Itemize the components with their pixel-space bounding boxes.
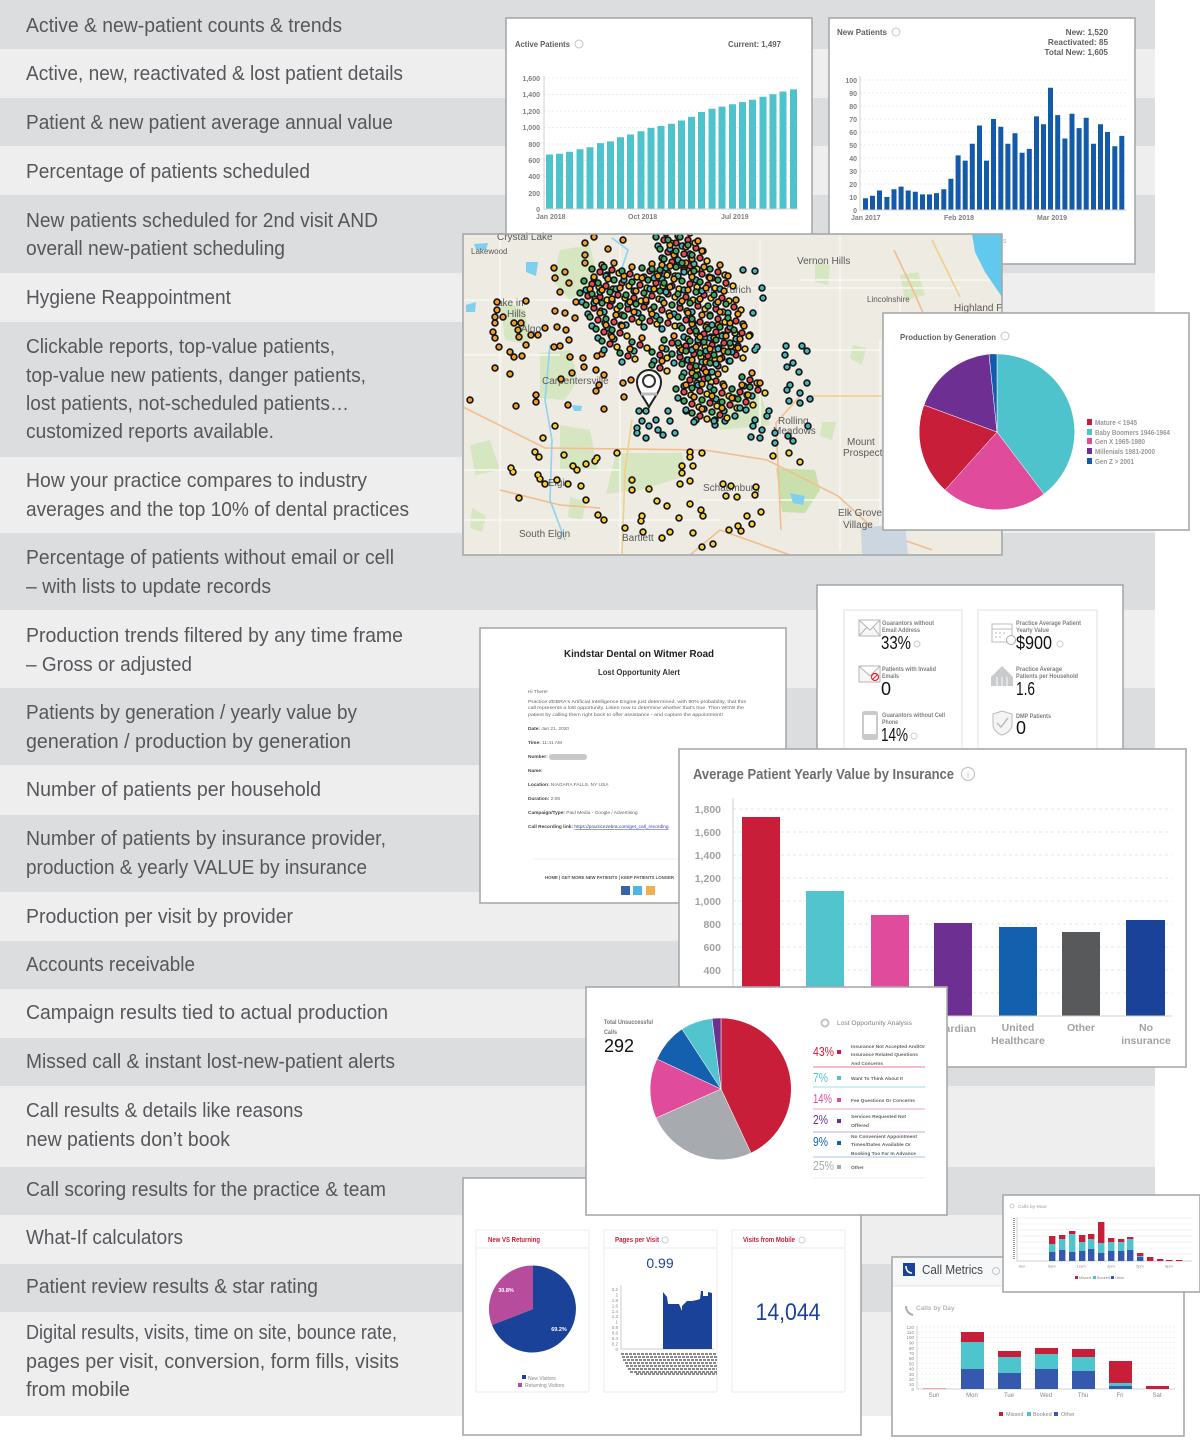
row: calculators xyxy=(0,1215,1155,1264)
stat: DMP patients: 0 xyxy=(1016,718,1026,738)
bar chart: insurance: 800 xyxy=(703,919,721,931)
panel: patient contact stats xyxy=(817,585,1123,765)
row: household: Number of patients per household xyxy=(26,779,321,801)
row: industry comparison: How your practice compares to industry xyxy=(26,470,367,492)
email body: Practice ZEBRA's Artificial Intelligence Engine just determined, with 90% probability, that this xyxy=(528,699,747,705)
row: campaign results: Campaign results tied to actual production xyxy=(26,1002,388,1024)
stat: yearly value: $900 xyxy=(1016,633,1052,653)
pie chart: lost opportunity xyxy=(650,1018,791,1160)
bar chart: calls by day: 120 xyxy=(906,1325,914,1330)
row: clickable reports: customized reports available. xyxy=(26,421,274,443)
bar chart: calls by hour: 5pm xyxy=(1136,1264,1144,1268)
map: place labels: Prospect xyxy=(843,448,883,459)
bar chart: calls by day: Mon xyxy=(966,1393,978,1399)
stat: invalid emails: Patients with Invalid xyxy=(882,666,936,673)
legend: calls by hour: Missed xyxy=(1079,1276,1091,1280)
bar chart: calls by day: 110 xyxy=(907,1330,914,1335)
stat: yearly value xyxy=(992,620,1082,653)
map: place labels: Rolling xyxy=(778,416,809,427)
map: place labels: Lake Zurich xyxy=(699,285,751,296)
row: clickable reports: top-value new patients, danger patients, xyxy=(26,365,366,387)
legend: calls by day: Other xyxy=(1061,1412,1075,1418)
legend: calls by hour: Other xyxy=(1115,1276,1125,1280)
legend row: think about it xyxy=(813,1070,925,1087)
bar chart: new patients: 60 xyxy=(849,130,857,137)
card: pages per visit: 1 xyxy=(615,1320,618,1324)
bar chart: calls by hour xyxy=(1014,1217,1192,1268)
row: email or cell xyxy=(0,533,1155,610)
row: industry comparison: averages and the top 10% of dental practices xyxy=(26,499,409,521)
row: hygiene xyxy=(0,273,1155,322)
bar chart: active patients: 0 xyxy=(536,207,540,214)
map: green areas xyxy=(470,245,925,532)
map: airport xyxy=(861,523,908,555)
legend row: appointment: No Convenient Appointment xyxy=(851,1134,917,1140)
row: clickable reports: Clickable reports, top-value patients, xyxy=(26,336,335,358)
bar chart: active patients: 1,000 xyxy=(522,125,540,132)
row: email or cell: Percentage of patients without email or cell xyxy=(26,547,394,569)
row: digital results: pages per visit, conversion, form fills, visits xyxy=(26,1351,399,1373)
row: patient counts xyxy=(0,0,1155,49)
map: place labels xyxy=(471,232,1003,544)
row: missed call alerts: Missed call & instant lost-new-patient alerts xyxy=(26,1051,395,1073)
email body xyxy=(528,689,747,830)
icon: map pin xyxy=(637,370,661,407)
bar chart: active patients: Oct 2018 xyxy=(628,214,657,221)
email body: patient by calling them right back to offer assistance - and capture the appointment! xyxy=(528,712,723,718)
icon: info: i xyxy=(967,770,969,780)
row: digital results xyxy=(0,1312,1155,1416)
stat: patients per household xyxy=(991,666,1078,699)
legend row: services: Services Requested Not xyxy=(851,1114,906,1120)
bar chart: active patients: Jan 2018 xyxy=(536,214,566,221)
legend row: fee questions: 14% xyxy=(813,1091,832,1106)
bar chart: active patients: 800 xyxy=(528,142,540,149)
panel: digital results xyxy=(463,1178,861,1435)
card: pages per visit: 0.6 xyxy=(612,1330,618,1336)
row: digital results: from mobile xyxy=(26,1379,130,1401)
row: call scoring xyxy=(0,1167,1155,1215)
panel: call metrics xyxy=(892,1257,1184,1436)
row: accounts receivable xyxy=(0,941,1155,989)
row: annual value xyxy=(0,98,1155,146)
row: second visit xyxy=(0,195,1155,273)
panel: lost opportunity analysis xyxy=(586,987,947,1215)
bar chart: calls by hour: 8pm xyxy=(1165,1264,1173,1268)
map: place labels: Village xyxy=(843,520,873,531)
bar chart: insurance: No xyxy=(1139,1022,1153,1034)
row: call results: new patients don’t book xyxy=(26,1129,231,1151)
email body: Campaign/Type: Paid Media - Google / Advertising xyxy=(528,810,638,816)
legend row: insurance: Insurance Related Questions xyxy=(851,1052,918,1058)
card: pages per visit: 0 xyxy=(615,1347,618,1352)
heading: practice name: Kindstar Dental on Witmer Road xyxy=(564,648,714,660)
legend row: services xyxy=(813,1112,925,1132)
legend row: appointment: Times/Dates Available Or xyxy=(851,1142,911,1148)
legend row: insurance: And Concerns xyxy=(851,1061,883,1067)
bar chart: insurance: insurance xyxy=(1121,1035,1171,1047)
stat: guarantors without email: Guarantors without xyxy=(882,620,935,627)
bar chart: active patients: 400 xyxy=(528,174,540,181)
legend row: insurance xyxy=(813,1044,925,1067)
stat: patients per household: Practice Average xyxy=(1016,666,1062,673)
icon: info xyxy=(962,768,974,780)
bar chart: calls by day: 0 xyxy=(911,1387,914,1392)
card: pages per visit: 2.2 xyxy=(612,1287,618,1292)
bar chart: calls by day: 60 xyxy=(909,1356,914,1361)
total calls xyxy=(604,1019,653,1056)
totals xyxy=(1044,28,1108,57)
stat: patients per household: 1.6 xyxy=(1016,679,1035,699)
legend row: think about it: 7% xyxy=(813,1070,828,1085)
card: visits from mobile: 14,044 xyxy=(756,1299,820,1326)
pie chart: generation xyxy=(919,354,1075,510)
email body: Location: NIAGARA FALLS, NY USA xyxy=(528,782,609,788)
legend row: appointment: Booking Too Far In Advance xyxy=(851,1151,916,1157)
stat: yearly value: Yearly Value xyxy=(1016,627,1049,634)
totals: Total New: 1,605 xyxy=(1044,48,1108,57)
row: call results xyxy=(0,1086,1155,1167)
card: pages per visit: 0.99 xyxy=(646,1255,674,1271)
heading: lost opportunity analysis: Lost Opportunity Analysis xyxy=(837,1020,913,1027)
icon: info xyxy=(892,28,900,36)
bar chart: insurance: 1,600 xyxy=(695,827,721,839)
bar chart: active patients: Jul 2019 xyxy=(721,214,749,221)
icons: social xyxy=(621,886,655,895)
row: second visit: New patients scheduled for 2nd visit AND xyxy=(26,210,378,232)
panel: lost opportunity email xyxy=(480,628,786,903)
email body: call represents a lost opportunity. Listen now to determine whether that's true. Then WOW the xyxy=(528,705,744,711)
card: pages per visit xyxy=(604,1230,717,1392)
panel: active patients chart xyxy=(506,18,812,248)
bar chart: insurance: Other xyxy=(1067,1022,1095,1034)
bar chart: calls by day: 80 xyxy=(909,1346,914,1351)
legend: calls by day: Booked xyxy=(1033,1412,1052,1418)
legend row: services: 2% xyxy=(813,1112,828,1127)
row: production per visit: Production per visit by provider xyxy=(26,906,293,928)
totals: New: 1,520 xyxy=(1066,28,1108,37)
row: missed call alerts xyxy=(0,1038,1155,1086)
stat: yearly value: Practice Average Patient xyxy=(1016,620,1082,627)
legend row: other: 25% xyxy=(813,1158,834,1173)
heading: new patients: New Patients xyxy=(837,27,887,37)
bar chart: new patients: 100 xyxy=(845,78,857,85)
row: second visit: overall new-patient scheduling xyxy=(26,238,285,260)
bar chart: active patients: 200 xyxy=(528,191,540,198)
map: water xyxy=(466,234,1002,505)
stat: guarantors without cell: Phone xyxy=(882,719,898,726)
row: production per visit xyxy=(0,892,1155,941)
legend: calls by hour xyxy=(1075,1276,1125,1280)
map: place labels: Meadows xyxy=(773,426,816,437)
legend row: think about it: Want To Think About It xyxy=(851,1076,903,1082)
row: patient details: Active, new, reactivated & lost patient details xyxy=(26,63,403,85)
map: place labels: Schaumburg xyxy=(703,483,760,494)
row: email or cell: – with lists to update records xyxy=(26,576,271,598)
bar chart: new patients: 90 xyxy=(849,91,857,98)
subheading: calls by hour: Calls by Hour xyxy=(1018,1204,1047,1209)
row: digital results: Digital results, visits, time on site, bounce rate, xyxy=(26,1322,397,1344)
bar chart: calls by day: Sat xyxy=(1152,1393,1162,1399)
bar chart: insurance: United xyxy=(1002,1022,1034,1034)
total calls: Calls xyxy=(604,1029,617,1036)
legend: calls by day: Missed xyxy=(1006,1412,1023,1418)
heading: active patients: Active Patients xyxy=(515,39,570,49)
map: place labels: Hills xyxy=(507,309,526,320)
bar chart: calls by day: Fri xyxy=(1116,1393,1124,1399)
bar chart: calls by day: 40 xyxy=(909,1366,914,1372)
legend row: fee questions: Fee Questions Or Concerns xyxy=(851,1098,915,1104)
map: highways xyxy=(463,240,960,555)
bar chart: new patients: Feb 2018 xyxy=(944,215,974,222)
stat: guarantors without cell xyxy=(862,711,945,745)
bar chart: calls by day: 70 xyxy=(909,1351,914,1356)
bar chart: calls by day: 50 xyxy=(909,1362,914,1366)
total calls: 292 xyxy=(604,1036,634,1056)
bar chart: new patients: 30 xyxy=(849,169,857,176)
icon: info xyxy=(1001,332,1009,340)
bar chart: active patients xyxy=(522,76,798,221)
legend: generation: Baby Boomers 1946-1964 xyxy=(1095,428,1171,437)
card: pages per visit: 0.4 xyxy=(612,1336,618,1341)
card: pages per visit: Pages per Visit xyxy=(615,1237,660,1244)
panel: new patients chart xyxy=(829,18,1135,264)
bar chart: calls by day: 10 xyxy=(909,1382,914,1387)
bar chart: calls by day: 100 xyxy=(906,1335,914,1340)
bar chart: active patients: 600 xyxy=(528,158,540,165)
email body: Date: Jan 21, 2020 xyxy=(528,726,569,732)
row: annual value: Patient & new patient average annual value xyxy=(26,112,393,134)
bar chart: calls by hour: 8am xyxy=(1048,1264,1056,1268)
stat: guarantors without email: Email Address xyxy=(882,627,920,634)
map: place labels: Elk Grove xyxy=(838,508,882,519)
stat: invalid emails: 0 xyxy=(881,679,891,699)
map: place labels: Elgin xyxy=(548,478,570,489)
stat: invalid emails: Emails xyxy=(882,673,899,680)
map: place labels: Algo xyxy=(521,324,541,335)
card: new vs returning: 30.8% xyxy=(498,1288,514,1294)
panel: calls by hour xyxy=(1003,1195,1200,1292)
row: industry comparison xyxy=(0,457,1155,533)
row: accounts receivable: Accounts receivable xyxy=(26,954,195,976)
subheading: calls by day: Calls by Day xyxy=(916,1305,955,1312)
row: production trends: Production trends filtered by any time frame xyxy=(26,625,403,647)
card: visits from mobile xyxy=(732,1230,845,1392)
legend row: insurance: Insurance Not Accepted And/Or xyxy=(851,1044,925,1050)
card: new vs returning: Returning Visitors xyxy=(525,1383,565,1389)
card: visits from mobile: Visits from Mobile xyxy=(743,1237,795,1244)
card: new vs returning: 69.2% xyxy=(551,1327,567,1333)
stat: patients per household: Patients per Household xyxy=(1016,673,1078,680)
map: place labels: Bartlett xyxy=(622,533,654,544)
bar chart: calls by day: 90 xyxy=(909,1340,914,1346)
stat: DMP patients: DMP Patients xyxy=(1016,713,1051,720)
legend: calls by day xyxy=(999,1412,1075,1418)
row: patient counts: Active & new-patient counts & trends xyxy=(26,15,342,37)
email body: Hi There! xyxy=(528,689,548,695)
bar chart: new patients: 70 xyxy=(849,117,857,124)
row: reviews: Patient review results & star rating xyxy=(26,1276,318,1298)
total calls: Total Unsuccessful xyxy=(604,1019,653,1026)
legend: generation: Gen Z > 2001 xyxy=(1095,457,1134,466)
map: place labels: ake in xyxy=(497,298,524,309)
email body: Call Recording link: https://practicezebra.com/get_call_recording xyxy=(528,824,669,830)
bar chart: insurance: 1,800 xyxy=(695,804,721,816)
legend: generation xyxy=(1087,418,1171,466)
row: household xyxy=(0,765,1155,815)
bar chart: calls by day: Sun xyxy=(929,1393,939,1399)
legend row: appointment xyxy=(813,1134,925,1157)
legend row: other: Other xyxy=(851,1165,864,1171)
heading: call metrics: Call Metrics xyxy=(922,1263,983,1277)
legend: calls by hour: Booked xyxy=(1097,1276,1110,1280)
icon: phone badge xyxy=(903,1263,915,1276)
bar chart: calls by day: Thu xyxy=(1078,1393,1088,1399)
bar chart: new patients: 0 xyxy=(853,208,857,215)
card: pages per visit: 2 xyxy=(615,1292,618,1298)
bar chart: new patients: 50 xyxy=(849,143,857,150)
row: patient details xyxy=(0,49,1155,98)
bar chart: new patients: 40 xyxy=(849,156,857,163)
legend row: appointment: 9% xyxy=(813,1134,828,1149)
current value: Current: 1,497 xyxy=(728,39,781,49)
card: pages per visit: 1.8 xyxy=(612,1298,618,1303)
stray legend fragment: s xyxy=(1003,238,1007,245)
map: frame xyxy=(463,234,1002,555)
row: percentage scheduled: Percentage of patients scheduled xyxy=(26,161,310,183)
legend row: fee questions xyxy=(813,1091,925,1109)
legend: generation: Gen X 1965-1980 xyxy=(1095,437,1145,446)
card: pages per visit: 1.2 xyxy=(612,1314,618,1319)
card: pages per visit: 0.8 xyxy=(612,1325,618,1330)
bar chart: insurance: 600 xyxy=(703,942,721,954)
icon: info xyxy=(575,40,583,48)
card: new vs returning: New VS Returning xyxy=(488,1237,540,1244)
bar chart: calls by day xyxy=(906,1325,1175,1399)
totals: Reactivated: 85 xyxy=(1048,38,1108,47)
heading: Average Patient Yearly Value by Insurance xyxy=(693,767,954,783)
bar chart: active patients: 1,600 xyxy=(522,76,540,83)
bar chart: new patients: 10 xyxy=(849,195,857,202)
map: place labels: Lakewood xyxy=(471,247,507,256)
map: place labels: Lincolnshire xyxy=(867,295,910,304)
bar chart: new patients xyxy=(845,76,1127,222)
legend row: other xyxy=(813,1158,925,1178)
row: production trends: – Gross or adjusted xyxy=(26,654,192,676)
subheading: alert: Lost Opportunity Alert xyxy=(598,667,680,677)
icon: analysis xyxy=(822,1020,828,1026)
legend: generation: Mature < 1945 xyxy=(1095,418,1137,427)
row: insurance: Number of patients by insurance provider, xyxy=(26,828,386,850)
legend row: services: Offered xyxy=(851,1123,869,1129)
row: call results: Call results & details like reasons xyxy=(26,1100,303,1122)
map: place labels: Vernon Hills xyxy=(797,256,850,267)
bar chart: calls by hour: Sun xyxy=(1019,1264,1025,1268)
map: place labels: South Elgin xyxy=(519,529,570,540)
footer links: HOME | GET MORE NEW PATIENTS | KEEP PATIENTS LONGER xyxy=(545,875,675,880)
stat: guarantors without email xyxy=(859,620,935,653)
map: place labels: Crystal Lake xyxy=(497,232,553,243)
row: generation xyxy=(0,688,1155,765)
bar chart: new patients: Jan 2017 xyxy=(851,215,881,222)
panel: patient map xyxy=(463,232,1003,555)
icon: info xyxy=(1010,1204,1014,1208)
stat: guarantors without cell: Guarantors without Cell xyxy=(882,712,945,719)
row: call scoring: Call scoring results for the practice & team xyxy=(26,1179,386,1201)
bar chart: insurance: 1,200 xyxy=(695,873,721,885)
row: production trends xyxy=(0,610,1155,688)
row: clickable reports: lost patients, not-scheduled patients… xyxy=(26,393,349,415)
row: generation: generation / production by generation xyxy=(26,731,351,753)
icon: info xyxy=(992,1268,1000,1274)
bar chart: calls by day: 30 xyxy=(909,1372,914,1377)
bar chart: insurance: Guardian xyxy=(930,1023,976,1035)
email body: Time: 11:41 AM xyxy=(528,740,562,746)
row: hygiene: Hygiene Reappointment xyxy=(26,287,231,309)
panel: production by generation xyxy=(883,313,1189,530)
bar chart: new patients: 80 xyxy=(849,104,857,111)
bar chart: calls by day: 20 xyxy=(909,1377,914,1382)
row: clickable reports xyxy=(0,322,1155,457)
email body: Number: xyxy=(528,754,548,760)
bar chart: insurance: 1,400 xyxy=(695,850,721,862)
card: pages per visit: 1.6 xyxy=(612,1304,618,1308)
map: place labels: Mount xyxy=(847,437,875,448)
legend row: insurance: 43% xyxy=(813,1044,834,1059)
bar chart: calls by day: Wed xyxy=(1040,1393,1052,1399)
row: campaign results xyxy=(0,989,1155,1038)
bar chart: new patients: 20 xyxy=(849,182,857,189)
row: reviews xyxy=(0,1264,1155,1312)
bar chart: calls by day: Tue xyxy=(1004,1393,1015,1399)
map: patient dots xyxy=(470,233,810,547)
bar chart: insurance: 1,000 xyxy=(695,896,721,908)
card: new vs returning: New Visitors xyxy=(528,1376,556,1382)
bar chart: insurance: Healthcare xyxy=(991,1035,1045,1047)
panel: average patient yearly value by insurance xyxy=(679,749,1186,1067)
icon: phone xyxy=(906,1306,913,1315)
stat: guarantors without cell: 14% xyxy=(881,725,908,745)
stat: guarantors without email: 33% xyxy=(881,633,911,653)
stat: DMP patients xyxy=(993,711,1051,738)
row: insurance xyxy=(0,815,1155,892)
row: calculators: What-If calculators xyxy=(26,1227,183,1249)
card: new vs returning xyxy=(476,1230,589,1392)
bar chart: new patients: Mar 2019 xyxy=(1037,215,1067,222)
bar chart: insurance: 400 xyxy=(703,965,721,977)
row: percentage scheduled xyxy=(0,146,1155,195)
bar chart: active patients: 1,200 xyxy=(522,109,540,116)
map: place labels: Highland P xyxy=(954,303,1003,314)
row: insurance: production & yearly VALUE by insurance xyxy=(26,857,367,879)
bar chart: active patients: 1,400 xyxy=(522,92,540,99)
bar chart: calls by hour: 11am xyxy=(1076,1264,1086,1268)
card: pages per visit: 1.4 xyxy=(612,1309,618,1314)
bar chart: calls by hour: 2pm xyxy=(1107,1264,1115,1268)
email body: Name: xyxy=(528,768,543,774)
map: roads xyxy=(463,234,1002,555)
email body: Duration: 2:06 xyxy=(528,796,560,802)
map: place labels: Carpentersville xyxy=(542,376,609,387)
legend: generation: Millenials 1981-2000 xyxy=(1095,447,1155,456)
bar chart: insurance xyxy=(695,798,1172,1047)
stat: invalid emails xyxy=(859,666,936,699)
map: rivers xyxy=(545,238,628,540)
card: pages per visit: 0.2 xyxy=(612,1342,618,1346)
row: generation: Patients by generation / yearly value by xyxy=(26,702,357,724)
heading: Production by Generation xyxy=(900,332,996,342)
